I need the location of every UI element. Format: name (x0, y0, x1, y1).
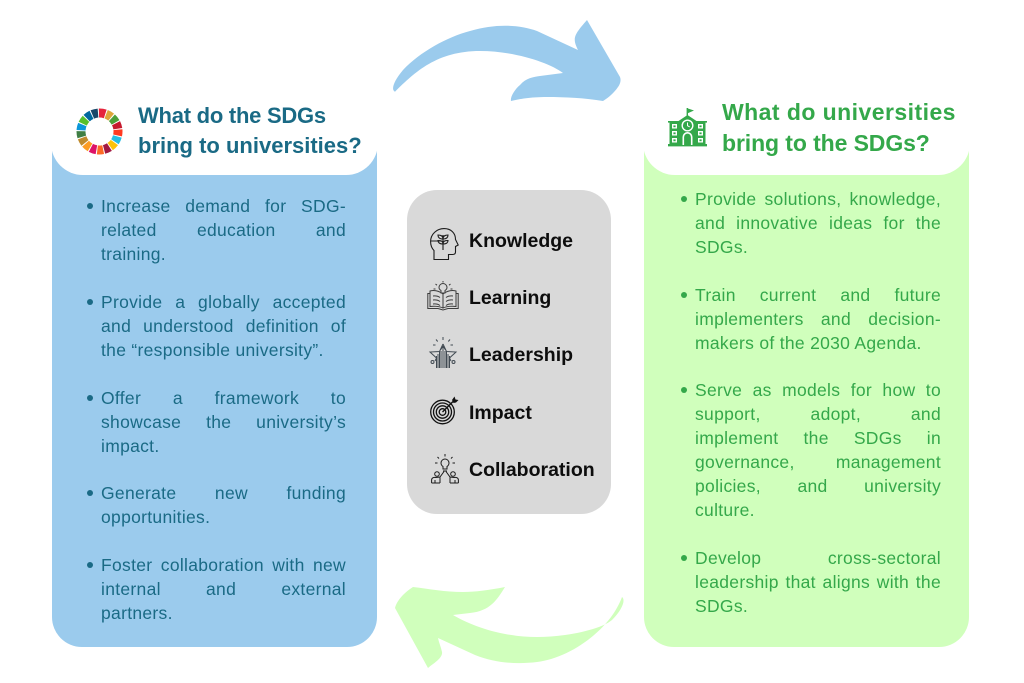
text block: right panel bullets: Provide solutions, knowledge, (695, 189, 941, 209)
text block: right panel bullets: policies, and university (695, 476, 941, 496)
panel background: blue (52, 100, 377, 647)
icon: collaboration people with bulb (431, 454, 459, 484)
heading: what do universities bring to the SDGs (722, 99, 956, 156)
text block: left panel bullets: training. (101, 244, 166, 264)
icon: leadership star with arrows (428, 337, 458, 368)
label: Collaboration: Collaboration (469, 459, 595, 481)
text block: left panel bullets: the “responsible university”. (101, 340, 324, 360)
text block: left panel bullets: partners. (101, 603, 173, 623)
panel background: green (644, 100, 969, 647)
text block: left panel bullets: showcase the university’s (101, 412, 346, 432)
text block: right panel bullets (681, 189, 941, 616)
panel header: white cap (51, 100, 378, 175)
text block: left panel bullets: Generate new funding (101, 483, 346, 503)
text block: right panel bullets: support, adopt, and (695, 404, 941, 424)
heading: what do universities bring to the SDGs: bring to the SDGs? (722, 130, 930, 156)
text block: right panel bullets: Serve as models for how to (695, 380, 941, 400)
text block: right panel bullets: implementers and decision- (695, 309, 941, 329)
text block: left panel bullets: Foster collaboration with new (101, 555, 346, 575)
label: Knowledge: Knowledge (469, 230, 573, 252)
text block: right panel bullets: Develop cross-sectoral (695, 548, 941, 568)
text block: right panel bullets: and innovative ideas for the (695, 213, 941, 233)
heading: what do universities bring to the SDGs: What do universities (722, 99, 956, 125)
text block: left panel bullets: Offer a framework to (101, 388, 346, 408)
text block: left panel bullets: opportunities. (101, 507, 210, 527)
text block: right panel bullets: leadership that aligns with the (695, 572, 941, 592)
heading: what do the SDGs bring to universities: bring to universities? (138, 133, 362, 158)
icon: SDG colour wheel (76, 108, 122, 154)
icon: impact target with dart (430, 396, 458, 424)
text block: left panel bullets: related education and (101, 220, 346, 240)
heading: what do the SDGs bring to universities: What do the SDGs (138, 103, 326, 128)
label: Leadership: Leadership (469, 344, 573, 366)
icon: university building (668, 108, 707, 146)
text block: right panel bullets: SDGs. (695, 237, 748, 257)
label: Impact: Impact (469, 402, 532, 424)
panel: what universities bring to the SDGs (644, 151, 969, 647)
panel header: white cap (643, 100, 970, 175)
panel: what the SDGs bring to universities (52, 151, 377, 647)
panel: central grey themes (407, 190, 611, 514)
text block: left panel bullets: and understood definition of (101, 316, 346, 336)
text block: right panel bullets: Train current and future (695, 285, 941, 305)
icon: learning open book with bulb (427, 281, 459, 310)
text block: right panel bullets: governance, management (695, 452, 941, 472)
text block: left panel bullets: impact. (101, 436, 160, 456)
text block: left panel bullets: Provide a globally accepted (101, 292, 346, 312)
text block: left panel bullets: internal and external (101, 579, 346, 599)
text block: left panel bullets (87, 196, 346, 623)
text block: right panel bullets: SDGs. (695, 596, 748, 616)
text block: left panel bullets: Increase demand for SDG- (101, 196, 346, 216)
text block: right panel bullets: culture. (695, 500, 755, 520)
label: Learning: Learning (469, 287, 551, 309)
icon: knowledge head with plant (430, 228, 459, 260)
heading: what do the SDGs bring to universities (138, 103, 362, 158)
text block: right panel bullets: implement the SDGs in (695, 428, 941, 448)
text block: right panel bullets: makers of the 2030 Agenda. (695, 333, 922, 353)
